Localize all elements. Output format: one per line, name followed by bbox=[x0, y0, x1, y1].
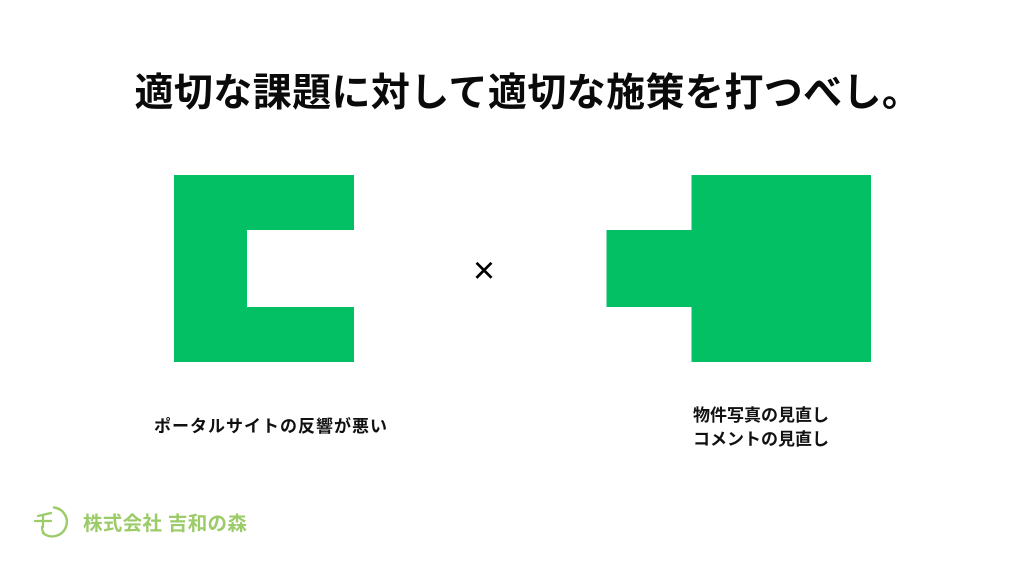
right caption: コメントの見直し bbox=[693, 430, 829, 449]
company name: 株式会社 吉和の森 bbox=[83, 513, 247, 535]
title: 適切な課題に対して適切な施策を打つべし。 bbox=[134, 72, 921, 115]
icon: logo circle bbox=[34, 506, 68, 538]
right caption bbox=[693, 406, 829, 449]
right caption: 物件写真の見直し bbox=[693, 406, 829, 425]
multiplication sign: × bbox=[473, 250, 495, 292]
company logo bbox=[34, 506, 247, 538]
left caption: ポータルサイトの反響が悪い bbox=[154, 417, 388, 436]
